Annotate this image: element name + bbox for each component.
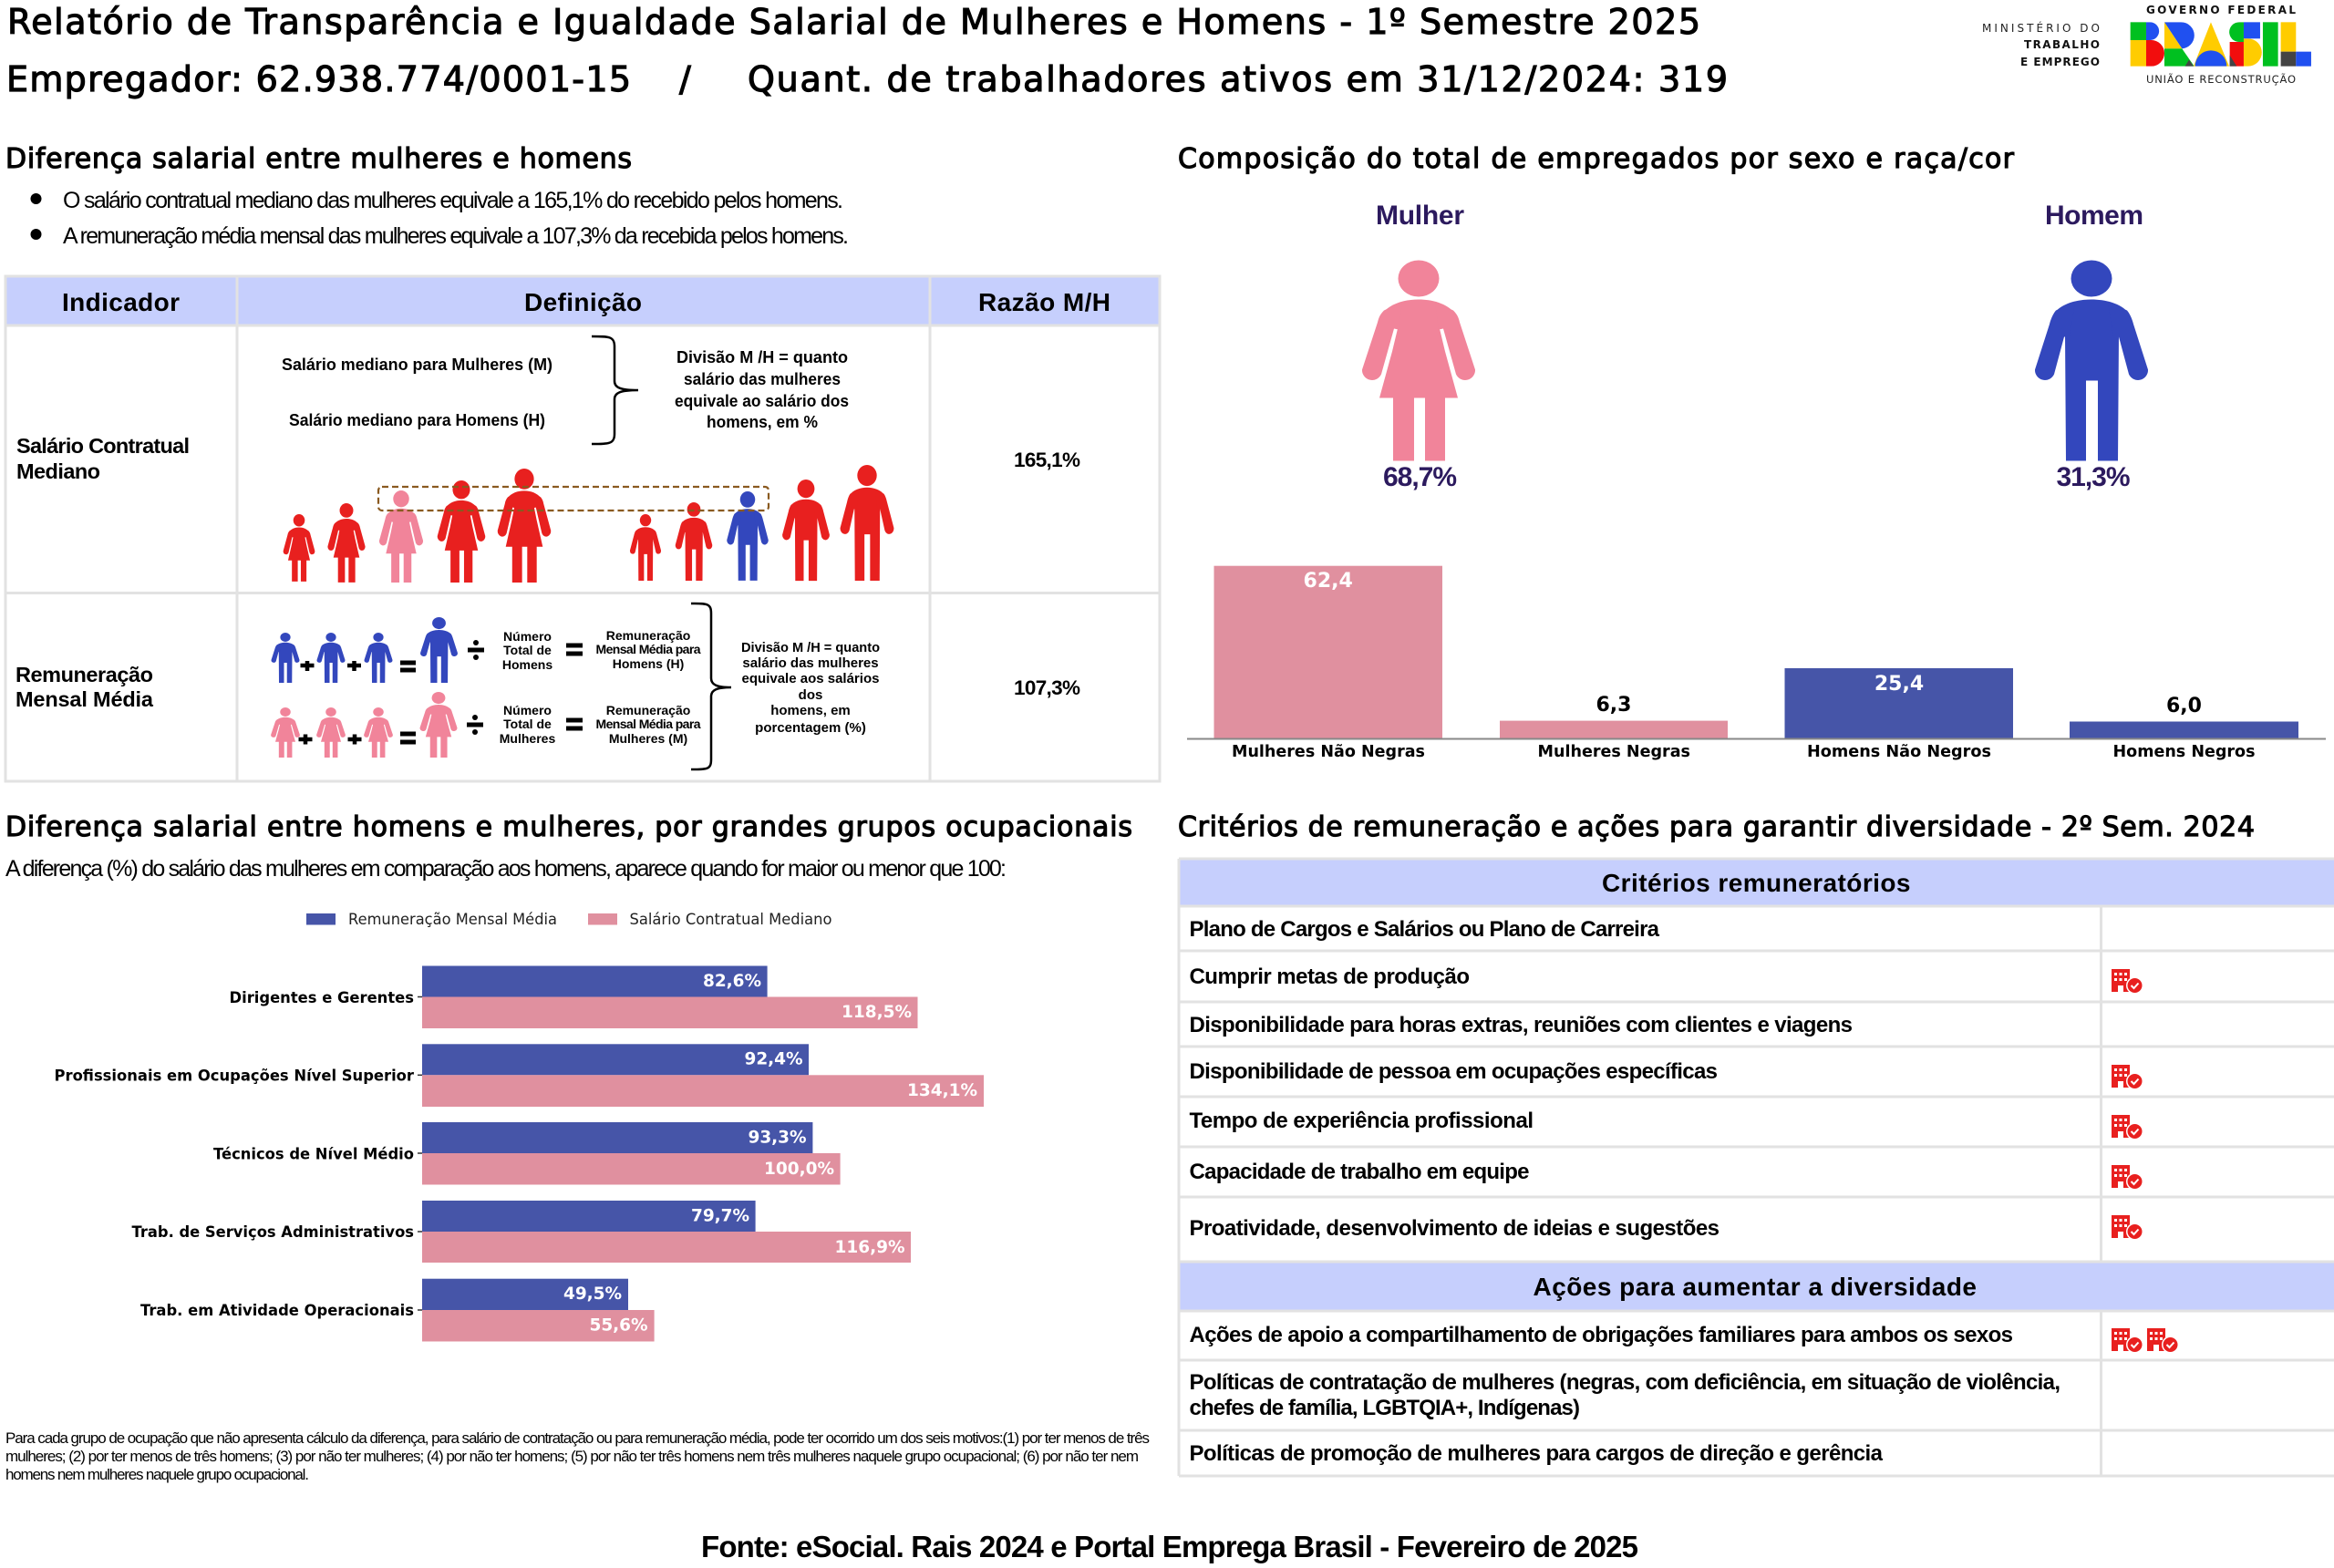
criteria list: Capacidade de trabalho em equipe	[1189, 1160, 1530, 1184]
explanation: divisão M/H: equivale ao salário dos	[675, 392, 849, 410]
actions list: Políticas de promoção de mulheres para cargos de direção e gerência	[1189, 1441, 1884, 1466]
legend: Remuneração Mensal Média	[348, 911, 557, 928]
criteria list: Disponibilidade para horas extras, reuniões com clientes e viagens	[1189, 1013, 1853, 1037]
formula: homens: Homens	[502, 657, 553, 672]
explanation: divisão M/H: homens, em %	[707, 413, 818, 431]
heading: grupos ocupacionais: Diferença salarial entre homens e mulheres, por grandes grupos ocupacionais	[5, 811, 1132, 843]
row label: remuneração mensal média: Mensal Média	[15, 687, 154, 711]
group: atividade operacionais: 55,6%	[589, 1316, 647, 1335]
icon: mulher	[1362, 261, 1475, 461]
explanation: divisão M/H: salário das mulheres	[684, 370, 841, 388]
formula: mulheres: Número	[503, 703, 552, 717]
logo: ministério e governo federal: E EMPREGO	[2020, 56, 2100, 68]
formula: homens: Homens (H)	[613, 656, 684, 671]
source: Fonte: eSocial. Rais 2024 e Portal Emprega Brasil - Fevereiro de 2025	[701, 1530, 1638, 1563]
panel: mulher: Mulher	[1376, 201, 1464, 231]
formula: mulheres: Mensal Média para	[596, 717, 701, 731]
criteria list: Tempo de experiência profissional	[1189, 1109, 1534, 1133]
logo: ministério e governo federal: MINISTÉRIO DO	[1982, 21, 2100, 35]
bar chart: sexo e raça/cor: 25,4	[1874, 673, 1924, 696]
bar chart: sexo e raça/cor	[1187, 566, 2326, 761]
title: Relatório de Transparência e Igualdade Salarial de Mulheres e Homens - 1º Semestre 2025	[7, 2, 1700, 42]
group: dirigentes e gerentes: Dirigentes e Gerentes	[230, 989, 414, 1007]
panel: tabela de critérios	[1179, 859, 2334, 1476]
criteria list: Plano de Cargos e Salários ou Plano de Carreira	[1189, 917, 1660, 942]
group: técnicos: 93,3%	[748, 1129, 806, 1147]
footnote	[5, 1429, 1150, 1483]
explanation: remuneração: homens, em	[770, 703, 851, 718]
explanation: divisão M/H	[675, 348, 849, 431]
heading: critérios: Critérios de remuneração e ações para garantir diversidade - 2º Sem. 2024	[1178, 811, 2255, 843]
bullet list: O salário contratual mediano das mulheres equivale a 165,1% do recebido pelos homens.	[63, 188, 843, 213]
explanation: remuneração: porcentagem (%)	[755, 720, 866, 736]
title: Empregador: 62.938.774/0001-15	[6, 59, 631, 99]
group: dirigentes e gerentes	[230, 966, 917, 1028]
bar chart: sexo e raça/cor: Homens Não Negros	[1807, 742, 1991, 761]
bar chart: sexo e raça/cor: 6,3	[1596, 694, 1631, 717]
explanation: remuneração: dos	[799, 687, 822, 703]
row label: salário contratual mediano	[16, 434, 190, 483]
table header: Indicador	[62, 288, 180, 316]
title: Quant. de trabalhadores ativos em 31/12/2024: 319	[748, 59, 1728, 99]
bar chart: sexo e raça/cor: 6,0	[2166, 695, 2202, 717]
heading: diferença salarial: Diferença salarial entre mulheres e homens	[5, 143, 632, 175]
legend	[306, 911, 831, 928]
group: atividade operacionais: Trab. em Atividade Operacionais	[140, 1302, 414, 1320]
formula: homens: Mensal Média para	[596, 642, 701, 656]
legend: Salário Contratual Mediano	[629, 911, 831, 928]
panel: mulher	[1362, 201, 1475, 492]
table header	[5, 276, 1160, 325]
group: profissionais: Profissionais em Ocupações Nível Superior	[55, 1067, 415, 1085]
group: atividade operacionais: 49,5%	[563, 1284, 622, 1304]
group: atividade operacionais	[140, 1279, 655, 1342]
heading: composição: Composição do total de empregados por sexo e raça/cor	[1178, 143, 2015, 175]
formula: mulheres	[271, 692, 701, 758]
logo: ministério e governo federal	[1982, 4, 2311, 86]
explanation: remuneração: Divisão M /H = quanto	[741, 640, 880, 655]
formula: homens	[271, 617, 701, 683]
row label: remuneração mensal média	[15, 663, 154, 711]
explanation: remuneração: equivale aos salários	[742, 671, 879, 686]
explanation: divisão M/H: Divisão M /H = quanto	[676, 348, 848, 366]
table header: Definição	[524, 288, 642, 316]
footnote: homens nem mulheres naquele grupo ocupacional.	[5, 1466, 309, 1483]
formula: mulheres: Mulheres (M)	[609, 731, 687, 746]
definition text: salário mediano: Salário mediano para Homens (H)	[289, 411, 545, 429]
panel: homem: Homem	[2045, 201, 2143, 231]
row label: salário contratual mediano: Salário Contratual	[16, 434, 190, 458]
bar chart: sexo e raça/cor: 62,4	[1304, 570, 1353, 593]
row label: salário contratual mediano: Mediano	[16, 459, 100, 483]
criteria list: Proatividade, desenvolvimento de ideias e sugestões	[1189, 1216, 1720, 1241]
bullet list: A remuneração média mensal das mulheres equivale a 107,3% da recebida pelos homens.	[63, 223, 849, 249]
logo: ministério e governo federal: UNIÃO E RECONSTRUÇÃO	[2146, 72, 2296, 86]
bar chart: sexo e raça/cor: Mulheres Negras	[1537, 742, 1690, 761]
brace	[592, 336, 638, 444]
group: técnicos: 100,0%	[764, 1160, 834, 1179]
formula: mulheres: Total de	[503, 717, 552, 731]
formula: homens: Remuneração	[606, 628, 690, 643]
group: serviços administrativos	[131, 1201, 911, 1263]
subtitle: A diferença (%) do salário das mulheres em comparação aos homens, aparece quando for maior ou menor que 100:	[5, 856, 1007, 882]
title: /	[679, 59, 691, 99]
actions list: Políticas de contratação de mulheres (negras, com deficiência, em situação de violência,	[1189, 1370, 2060, 1395]
icon: homem	[2035, 261, 2148, 461]
value: razão remuneração: 107,3%	[1014, 676, 1080, 699]
value: razão salário: 165,1%	[1014, 449, 1080, 471]
panel: tabela de indicadores	[5, 276, 1160, 781]
row label: remuneração mensal média: Remuneração	[15, 663, 153, 686]
dashed box: medianas	[378, 487, 769, 511]
group: profissionais: 134,1%	[907, 1081, 977, 1100]
title	[6, 2, 1728, 99]
icons: empresa com check	[2112, 969, 2179, 1353]
formula: homens: Total de	[503, 643, 552, 657]
panel: homem	[2035, 201, 2148, 492]
icons: homens ordenados por salário	[630, 465, 893, 581]
explanation: remuneração: salário das mulheres	[742, 655, 879, 671]
actions list: Ações de apoio a compartilhamento de obrigações familiares para ambos os sexos	[1189, 1323, 2013, 1347]
bar chart: grupos ocupacionais	[55, 966, 984, 1342]
logo: ministério e governo federal: TRABALHO	[2024, 38, 2100, 51]
definition text: salário mediano: Salário mediano para Mulheres (M)	[282, 356, 553, 374]
group: serviços administrativos: 116,9%	[835, 1238, 904, 1257]
formula: homens: Número	[503, 629, 552, 644]
bullet list	[31, 188, 849, 249]
table header: Razão M/H	[978, 288, 1110, 316]
actions list	[1189, 1323, 2060, 1466]
group: profissionais: 92,4%	[744, 1050, 802, 1068]
formula: mulheres: Mulheres	[500, 731, 555, 746]
bar chart: sexo e raça/cor: Mulheres Não Negras	[1232, 742, 1425, 761]
explanation: remuneração	[741, 640, 880, 736]
logo: ministério e governo federal: GOVERNO FEDERAL	[2146, 4, 2296, 16]
criteria list: Disponibilidade de pessoa em ocupações específicas	[1189, 1059, 1718, 1084]
group: profissionais	[55, 1044, 984, 1107]
header: ações para diversidade: Ações para aumentar a diversidade	[1534, 1273, 1977, 1301]
formula: mulheres: Remuneração	[606, 703, 690, 717]
definition text: salário mediano	[282, 356, 553, 429]
group: técnicos: Técnicos de Nível Médio	[213, 1145, 414, 1163]
group: dirigentes e gerentes: 118,5%	[842, 1003, 912, 1022]
panel: mulher: 68,7%	[1383, 462, 1457, 492]
bar chart: sexo e raça/cor: Homens Negros	[2113, 742, 2256, 761]
footnote: mulheres; (2) por ter menos de três homens; (3) por não ter mulheres; (4) por não ter homens; (5) por não ter três homens nem três mulheres naquele grupo ocupacional; (6) por não ter nem	[5, 1448, 1139, 1465]
criteria list	[1189, 917, 1853, 1241]
group: dirigentes e gerentes: 82,6%	[703, 972, 761, 991]
actions list: chefes de família, LGBTQIA+, Indígenas)	[1189, 1396, 1580, 1420]
group: serviços administrativos: Trab. de Serviços Administrativos	[131, 1223, 414, 1242]
footnote: Para cada grupo de ocupação que não apresenta cálculo da diferença, para salário de contratação ou para remuneração média, pode ter ocorrido um dos seis motivos:(1) por ter menos de três	[5, 1429, 1150, 1447]
group: técnicos	[213, 1122, 841, 1185]
icons: mulheres ordenadas por salário	[284, 469, 551, 583]
criteria list: Cumprir metas de produção	[1189, 965, 1470, 989]
group: serviços administrativos: 79,7%	[691, 1207, 749, 1225]
panel: homem: 31,3%	[2057, 462, 2130, 492]
header: critérios remuneratórios: Critérios remuneratórios	[1602, 869, 1911, 897]
brace	[691, 603, 731, 769]
